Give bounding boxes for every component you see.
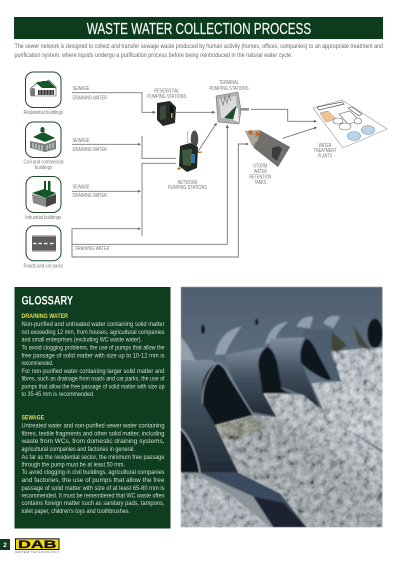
text block: draining water: not exceeding 12 mm, from houses, agricultural companies: [22, 329, 164, 336]
label: residential pumping stations: PUMPING STATIONS: [147, 94, 186, 100]
label: residential pumping stations: RESIDENTIAL: [154, 89, 179, 95]
flow labels: SEWAGE: [72, 138, 90, 144]
label: terminal pumping stations: [210, 80, 249, 92]
flow lines and arrows: [72, 93, 317, 257]
text block: sewage: passage of solid matter with size of at least 65-80 mm is: [22, 485, 164, 492]
text block: draining water: to 35-45 mm is recommended.: [22, 391, 95, 398]
text block: draining water: To avoid clogging problems, the use of pumps that allow the: [22, 344, 165, 352]
label: water treatment plants: TREATMENT: [314, 148, 337, 154]
logo: DAB: DAB: [18, 539, 57, 551]
icon: industrial buildings: [26, 176, 61, 212]
label: storm water retention tanks: RETENTION: [249, 175, 271, 181]
text block: sewage: [20, 414, 165, 515]
label: storm water retention tanks: TANKS: [254, 180, 267, 186]
icon: terminal pumping station: [216, 92, 249, 124]
label: residential pumping stations: [147, 89, 186, 100]
text block: draining water: Non-purified and untreated water containing solid matter: [22, 321, 165, 328]
text block: draining water: DRAINING WATER: [22, 313, 68, 320]
intro text: [14, 43, 383, 59]
text block: draining water: pumps that allow the free passage of solid matter with size up: [22, 384, 165, 390]
title banner: WASTE WATER COLLECTION PROCESS: [87, 21, 311, 38]
label: network pumping stations: NETWORK: [178, 180, 198, 186]
flow labels: SEWAGE: [72, 185, 90, 191]
flow labels: SEWAGE: [72, 86, 90, 92]
label: storm water retention tanks: STORM: [253, 164, 268, 170]
icon: residential buildings: [26, 72, 61, 108]
logo: DAB: [15, 539, 60, 554]
label: water treatment plants: PLANTS: [318, 154, 332, 160]
text block: sewage: agricultural companies and factories in general.: [22, 446, 135, 453]
panel: glossary: [14, 287, 170, 528]
text block: sewage: through the pump must be at least 50 mm.: [22, 462, 125, 468]
text block: sewage: Untreated water and non-purified sewer water containing: [22, 422, 165, 430]
text block: draining water: fibres, such as drainage from roads and car parks, the use of: [22, 376, 165, 382]
text block: sewage: waste from WCs, from domestic draining systems,: [20, 438, 165, 445]
icon: water treatment plant map: [313, 100, 387, 148]
label: civil and commercial buildings: Civil and commercial: [24, 160, 64, 166]
flow labels: DRAINING WATER: [72, 96, 107, 102]
text block: sewage: recommended. It must be remembered that WC waste often: [22, 492, 165, 500]
flow labels: DRAINING WATER: [72, 193, 107, 199]
label: water treatment plants: WATER: [318, 143, 332, 149]
title banner: [14, 17, 383, 39]
text block: sewage: fibres, textile fragments and other solid matter, including: [22, 430, 165, 438]
label: roads and car parks: Roads and car parks: [24, 264, 63, 270]
text block: sewage: As far as the residential sector, the minimum free passage: [22, 454, 165, 461]
label: industrial buildings: Industrial buildings: [25, 215, 62, 221]
text block: sewage: SEWAGE: [22, 414, 44, 422]
water foam texture: [181, 347, 383, 527]
label: terminal pumping stations: TERMINAL: [219, 80, 239, 86]
flow labels: DRAINING WATER: [75, 246, 110, 252]
label: terminal pumping stations: PUMPING STATIONS: [210, 86, 249, 92]
label: network pumping stations: PUMPING STATIONS: [168, 185, 207, 191]
label: civil and commercial buildings: buildings: [35, 165, 53, 171]
text block: sewage: and factories, the use of pumps that allow the free: [22, 477, 165, 484]
heading: glossary: GLOSSARY: [22, 296, 73, 308]
process diagram: [24, 72, 387, 270]
text block: draining water: free passage of solid matter with size up to 10-12 mm is: [22, 352, 164, 360]
icon: storm water retention tank: [245, 130, 290, 167]
page number: 2: [3, 542, 7, 549]
text block: sewage: contains foreign matter such as sanitary pads, tampons,: [22, 500, 165, 507]
photo: sewage pipes discharging water: [181, 287, 383, 527]
flow labels: DRAINING WATER: [72, 147, 107, 153]
label: storm water retention tanks: WATER: [254, 169, 267, 175]
label: residential buildings: Residential buildings: [24, 110, 63, 116]
text block: draining water: [22, 313, 165, 398]
text block: draining water: recommended.: [22, 360, 54, 367]
label: network pumping stations: [168, 180, 207, 191]
icon: civil and commercial buildings: [26, 122, 61, 158]
icon: roads and car parks: [26, 226, 61, 261]
icon: network pumping station: [177, 130, 202, 172]
text block: draining water: and small enterprises (excluding WC waste water).: [22, 336, 142, 344]
page number: [0, 539, 10, 550]
intro text: purification system, where liquids undergo a purification process before being reintroduced in the natural water cycle.: [14, 52, 293, 59]
text block: draining water: For non-purified water containing larger solid matter and: [22, 368, 165, 375]
text block: sewage: toilet paper, children's toys and toothbrushes.: [22, 508, 130, 515]
icon: residential pumping station: [157, 101, 176, 126]
label: water treatment plants: [314, 143, 337, 160]
label: storm water retention tanks: [249, 164, 271, 186]
logo: DAB: WATER TECHNOLOGY: [15, 550, 60, 554]
text block: sewage: To avoid clogging in civil buildings, agricultural companies: [22, 469, 164, 476]
flow labels: [72, 86, 110, 252]
label: civil and commercial buildings: [24, 160, 64, 171]
